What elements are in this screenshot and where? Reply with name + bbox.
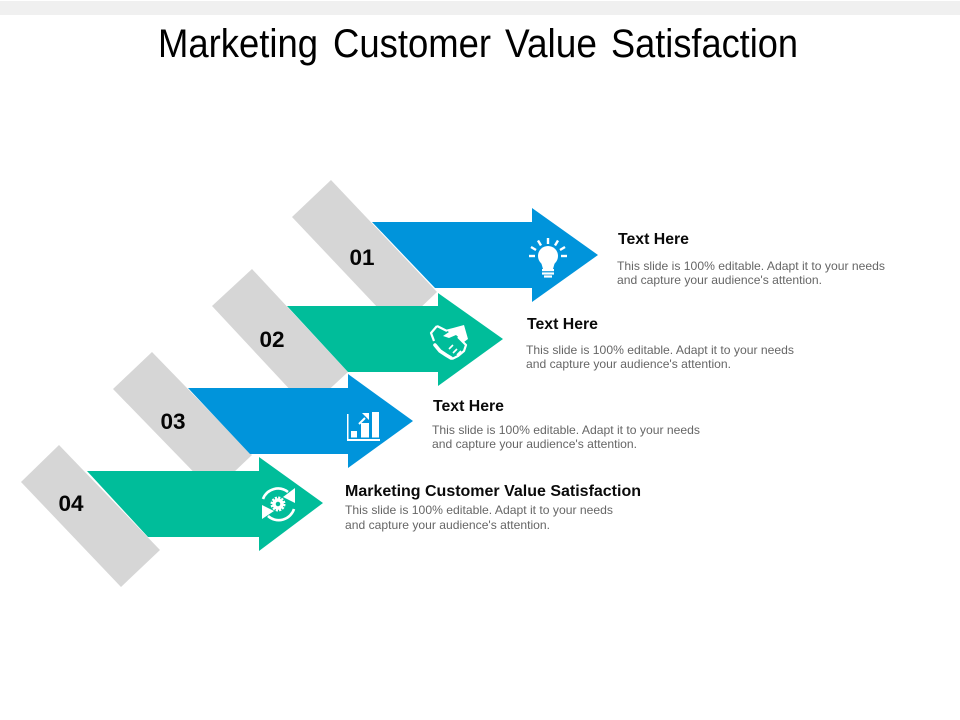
icon: light bulb <box>529 238 567 278</box>
text block 04: Marketing Customer Value Satisfaction <box>345 483 641 500</box>
text block 01: and capture your audience's attention. <box>617 273 822 287</box>
icon: handshake <box>431 325 468 359</box>
blue arrow 01 <box>372 208 598 302</box>
green arrow 02 <box>287 293 503 386</box>
step 01 <box>292 180 598 329</box>
number 04: 04 <box>58 491 84 516</box>
gray band 02 <box>212 269 348 409</box>
step 04 <box>21 445 323 587</box>
text block 03: This slide is 100% editable. Adapt it to your needs <box>432 423 700 437</box>
gray band 04 <box>21 445 160 587</box>
green arrow 04 <box>87 457 323 551</box>
text block 03 <box>432 398 700 451</box>
title: Customer <box>333 22 491 66</box>
text block 02: This slide is 100% editable. Adapt it to your needs <box>526 343 794 357</box>
number 02: 02 <box>259 327 285 352</box>
gray band 03 <box>113 352 252 492</box>
text block 02: and capture your audience's attention. <box>526 357 731 371</box>
blue arrow 03 <box>188 374 413 468</box>
text block 03: and capture your audience's attention. <box>432 437 637 451</box>
gray band 01 <box>292 180 437 329</box>
title <box>158 22 798 66</box>
title: Value <box>505 22 597 66</box>
text block 04: This slide is 100% editable. Adapt it to your needs <box>345 503 613 517</box>
text block 01: This slide is 100% editable. Adapt it to your needs <box>617 259 885 273</box>
text block 03: Text Here <box>433 398 504 415</box>
title: Marketing <box>158 22 318 66</box>
text block 01 <box>617 231 885 287</box>
icon: cycle with gear <box>262 488 295 520</box>
title: Satisfaction <box>611 22 798 66</box>
text block 04 <box>345 483 641 532</box>
number 01: 01 <box>349 245 375 270</box>
icon: bar chart <box>347 412 380 441</box>
step 02 <box>212 269 503 409</box>
text block 01: Text Here <box>618 231 689 248</box>
step 03 <box>113 352 413 492</box>
text block 02: Text Here <box>527 316 598 333</box>
text block 04: and capture your audience's attention. <box>345 518 550 532</box>
number 03: 03 <box>160 409 186 434</box>
text block 02 <box>526 316 794 371</box>
